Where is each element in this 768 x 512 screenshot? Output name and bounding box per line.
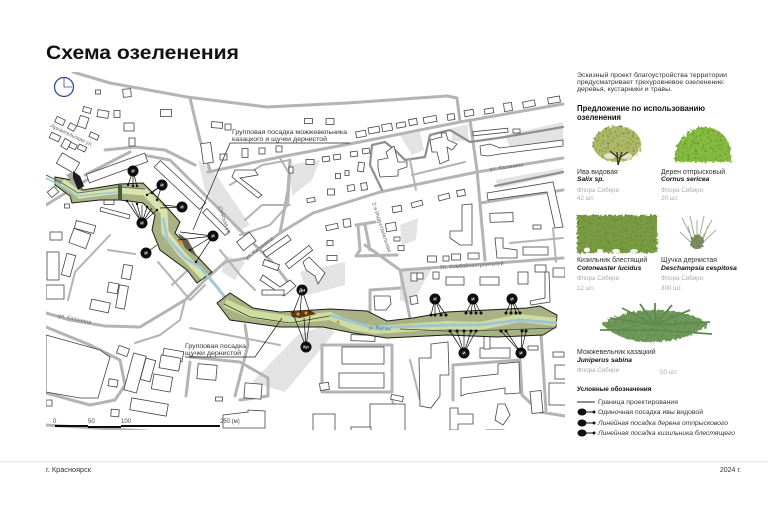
planting markers: east: И [462, 351, 466, 356]
planting markers: east: И [471, 297, 475, 302]
buildings [46, 89, 570, 441]
plant: juniper: Флора Сибири [577, 367, 620, 374]
planting markers: east: И [433, 297, 437, 302]
planting markers: willow, west: И [211, 234, 215, 239]
callout: tufted hair grass: Групповая посадка [185, 344, 247, 350]
plant: willow: Флора Сибири [577, 187, 620, 194]
planting markers: east [293, 284, 528, 358]
legend: Линейная посадка дерена отпрыскового [597, 419, 728, 427]
footer: 2024 г. [720, 467, 741, 474]
planting markers: east: Кл [303, 345, 309, 350]
footer: г. Красноярск [46, 467, 92, 474]
callout: tufted hair grass [185, 318, 282, 357]
plant: tufted hair grass: Deschampsia cespitosa [661, 265, 737, 272]
heading: planting proposal: Предложение по использованию [577, 104, 705, 113]
scale bar: 100 [121, 419, 132, 425]
callout: juniper and tufted hair grass: Групповая посадка можжевельника [232, 130, 348, 136]
plant: cotoneaster hedge: Флора Сибири [577, 275, 620, 282]
scale bar: 0 [53, 419, 57, 425]
plant: cotoneaster hedge: Кизильник блестящий [577, 256, 647, 264]
planting markers: east: И [519, 351, 523, 356]
plant: juniper: Можжевельник казацкий [577, 348, 656, 356]
planting markers: willow, west: И [144, 251, 148, 256]
planting markers: willow, west: И [160, 183, 164, 188]
plant: willow: Salix sp. [577, 176, 604, 183]
street labels: Сибская ул. [216, 206, 232, 237]
plant: tufted hair grass: Щучка дернистая [661, 257, 717, 264]
corridor: west section [46, 171, 227, 300]
gray green-space patches [198, 122, 563, 392]
intro text: деревья, кустарники и травы. [577, 86, 672, 93]
map [46, 72, 570, 441]
plant: cotoneaster hedge [577, 215, 657, 292]
planting markers: willow, west: И [131, 169, 135, 174]
street labels: ул. Калинина [245, 236, 275, 262]
heading: planting proposal: озеленения [577, 113, 621, 122]
plant: dogwood: Cornus sericea [661, 176, 710, 183]
plant: juniper: 50 шт. [660, 369, 678, 376]
plant: tufted hair grass: 300 шт. [661, 285, 682, 292]
legend: Граница проектирования [598, 399, 678, 406]
plant: dogwood: Флора Сибири [661, 187, 704, 194]
corridor: east section [217, 293, 557, 338]
plant: willow: 42 шт. [577, 195, 595, 202]
plant: juniper: Juniperus sabina [577, 357, 632, 364]
legend: Линейная посадка кизильника блестящего [597, 429, 735, 437]
heading: planting proposal [577, 104, 705, 122]
roads [46, 72, 565, 437]
plant: tufted hair grass [661, 216, 737, 292]
scale bar: 250 (м) [220, 419, 240, 425]
plant: tufted hair grass: Флора Сибири [661, 275, 704, 282]
scale bar [53, 419, 240, 428]
plant: willow: Ива видовая [577, 169, 618, 176]
planting markers: east: И [510, 297, 514, 302]
icon: compass [54, 78, 74, 96]
plant: willow [577, 126, 641, 202]
street labels [49, 123, 525, 326]
plant: dogwood: Дерен отпрысковый [661, 168, 725, 176]
planting markers: willow, west: И [140, 221, 144, 226]
footer [0, 461, 768, 474]
street labels: ул. Калинина [58, 313, 93, 326]
street labels: Ул. Комбайностроителей [440, 260, 504, 271]
legend: Одиночная посадка ивы видовой [598, 408, 703, 416]
planting markers: willow, west [126, 166, 218, 263]
plant: cotoneaster hedge: Cotoneaster lucidus [577, 265, 642, 272]
plant: dogwood [661, 127, 731, 202]
river label: р. Бугач [369, 325, 391, 333]
callout: tufted hair grass: щучки дернистой [185, 350, 241, 357]
street labels: ул. Калинина [489, 162, 525, 173]
street labels: 2-я Индустриальная [370, 202, 392, 253]
intro text [577, 71, 727, 93]
scale bar: 50 [88, 419, 95, 425]
callout: juniper and tufted hair grass [193, 130, 350, 230]
intro text: предусматривает трехуровневое озеленение: [577, 79, 725, 86]
plant: dogwood: 20 шт. [661, 195, 679, 202]
legend [577, 385, 735, 437]
planting markers: east: Дн [299, 288, 305, 293]
legend: Условные обозначения [577, 385, 652, 393]
street labels: Архангельская ул. [49, 123, 94, 149]
callout: juniper and tufted hair grass: казацкого и щучки дернистой [232, 136, 327, 143]
title: Схема озеленения [46, 43, 239, 64]
intro text: Эскизный проект благоустройства территории [577, 71, 727, 79]
plant: cotoneaster hedge: 12 шт. [577, 285, 595, 292]
planting markers: willow, west: И [180, 205, 184, 210]
plant: juniper [577, 303, 712, 376]
